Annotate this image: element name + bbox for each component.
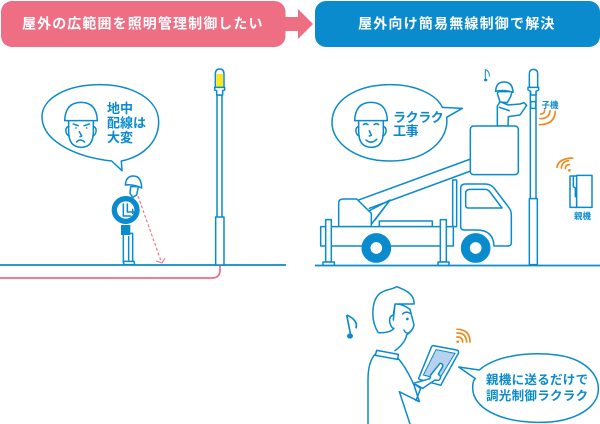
underground wiring — [0, 265, 220, 278]
banner: problem — [1, 1, 286, 47]
bubble text left: 配線は — [107, 116, 146, 130]
bubble text left: 大変 — [107, 130, 133, 145]
icon: signal waves tablet — [456, 329, 470, 343]
music note upper — [484, 69, 489, 81]
icon: worried face — [65, 102, 97, 147]
turret — [339, 199, 371, 227]
speech bubble: underground wiring is hard — [42, 85, 159, 171]
music note lower — [347, 315, 356, 339]
man with tablet — [368, 287, 459, 424]
aerial lift truck — [321, 159, 511, 265]
dashed survey arrow — [138, 196, 165, 263]
worker in lift basket — [470, 82, 527, 175]
banner: solution: 屋外向け簡易無線制御で解決 — [358, 16, 556, 32]
arrow between banners — [285, 9, 313, 39]
wheels — [366, 238, 387, 258]
banner: solution — [315, 1, 600, 47]
left street lamp — [215, 69, 225, 265]
bubble text right: ラクラク — [393, 110, 443, 125]
right ground line — [315, 264, 600, 266]
cab — [461, 184, 511, 246]
bubble text right: 工事 — [393, 124, 419, 138]
parent unit box — [570, 175, 592, 207]
banner: problem: 屋外の広範囲を照明管理制御したい — [22, 16, 264, 32]
icon: signal waves child unit — [539, 110, 555, 125]
tablet — [419, 346, 459, 385]
bubble text lower: 調光制御ラクラク — [486, 388, 588, 403]
speech bubble: easy installation — [332, 85, 462, 161]
boom — [357, 159, 471, 208]
outriggers — [326, 220, 331, 262]
worker with cable drum — [114, 176, 142, 265]
icon: happy face — [355, 102, 387, 147]
bubble text lower: 親機に送るだけで — [486, 372, 588, 387]
left ground line — [0, 264, 286, 266]
right street lamp with child unit — [528, 69, 539, 265]
chassis — [321, 227, 453, 246]
icon: signal waves parent unit — [557, 158, 573, 172]
label: child unit: 子機 — [542, 100, 559, 110]
bubble text left: 地中 — [107, 101, 133, 116]
label: parent unit: 親機 — [574, 211, 592, 221]
speech bubble: easy dimming — [459, 354, 598, 422]
